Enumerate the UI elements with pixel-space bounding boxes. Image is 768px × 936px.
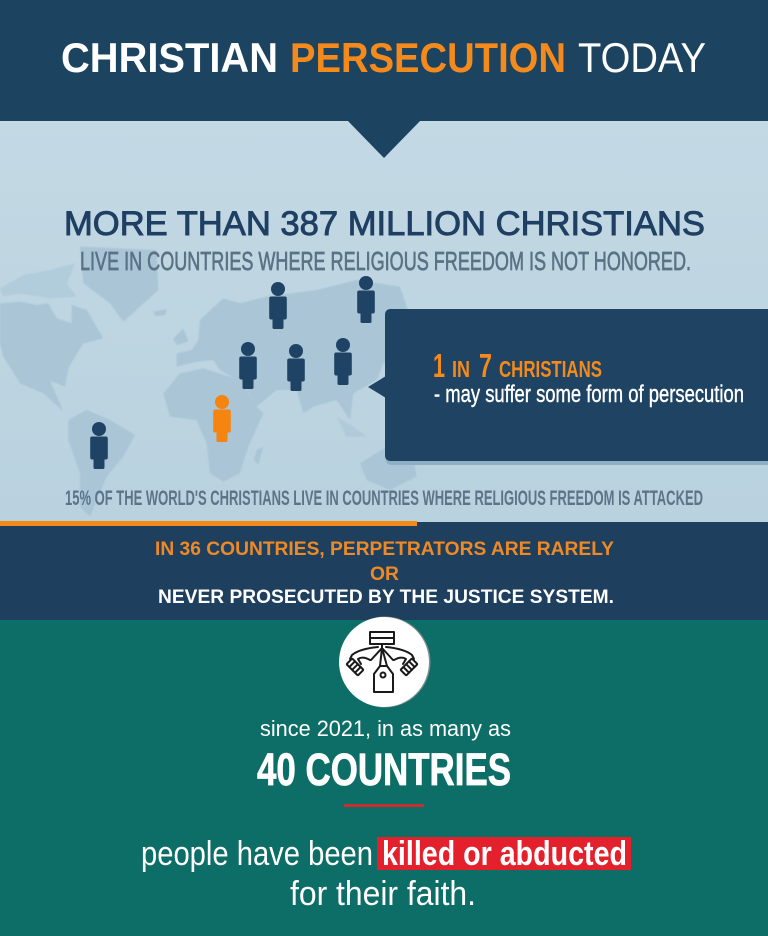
callout stat: IN — [452, 356, 470, 382]
panel: map section — [0, 121, 768, 523]
text: for their faith: for their faith. — [290, 875, 476, 913]
callout stat: CHRISTIANS — [499, 356, 602, 382]
callout stat: 7 — [479, 347, 492, 384]
panel: title banner — [0, 0, 768, 158]
panel: prosecution band — [0, 521, 768, 621]
prosecution text: IN 36 COUNTRIES, PERPETRATORS ARE RARELY — [155, 539, 614, 560]
callout stat — [433, 347, 602, 384]
icon: trafficked hands and price tag — [339, 616, 430, 708]
prosecution text — [155, 539, 614, 608]
title — [61, 34, 706, 81]
callout stat: 1 — [433, 347, 445, 384]
person: South America — [90, 422, 108, 469]
person: Africa highlighted — [213, 395, 231, 442]
text: people have been killed or abducted: people have been — [141, 835, 373, 873]
person: Middle East — [239, 342, 257, 389]
world map — [0, 247, 417, 517]
person: north Russia — [269, 282, 287, 329]
callout — [368, 309, 768, 465]
prosecution text: NEVER PROSECUTED BY THE JUSTICE SYSTEM. — [158, 587, 614, 608]
text: people have been killed or abducted — [141, 835, 631, 873]
prosecution text: OR — [370, 564, 399, 585]
headline: MORE THAN 387 MILLION CHRISTIANS — [64, 205, 705, 243]
text: since 2021: since 2021, in as many as — [260, 716, 511, 741]
title: CHRISTIAN — [61, 34, 278, 81]
red divider — [344, 804, 424, 807]
text: people have been killed or abducted: killed or abducted — [382, 835, 627, 873]
title: TODAY — [578, 34, 706, 81]
text: 40 countries: 40 COUNTRIES — [257, 744, 511, 795]
person: China — [334, 338, 352, 385]
person icons — [90, 276, 375, 469]
panel: green section — [0, 616, 768, 936]
person: Central Asia — [287, 344, 305, 391]
person: Siberia — [357, 276, 375, 323]
title: PERSECUTION — [290, 34, 566, 81]
